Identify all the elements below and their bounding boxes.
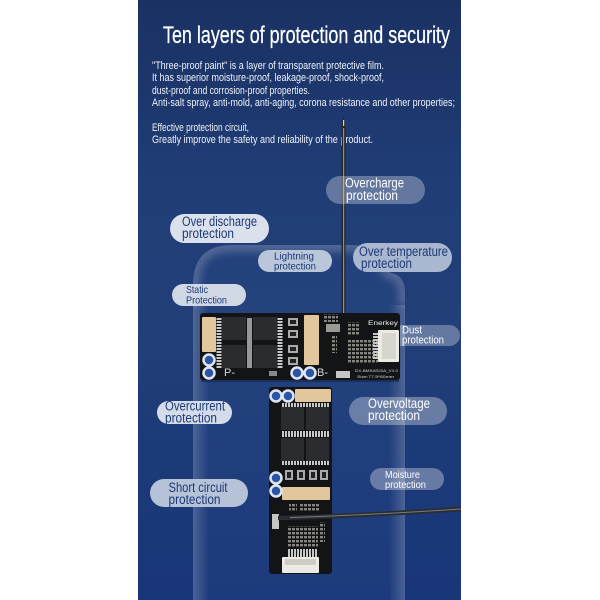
description text block — [152, 60, 455, 146]
label: overcharge protection: Overcharge — [345, 176, 404, 190]
label: short circuit protection: Short circuit — [168, 480, 228, 495]
label: over temperature protection: protection — [361, 256, 412, 271]
small components, horizontal board — [324, 314, 378, 378]
label: overcurrent protection — [157, 398, 232, 426]
label: over discharge protection: protection — [182, 226, 234, 241]
label: over temperature protection: Over temperature — [359, 244, 448, 259]
white connector, vertical board — [282, 557, 319, 573]
label: short circuit protection: protection — [168, 492, 220, 507]
mounting holes, horizontal board — [204, 354, 316, 378]
description text block: Effective protection circuit, — [152, 122, 249, 134]
description text block: Anti-salt spray, anti-mold, anti-aging, corona resistance and other properties; — [152, 97, 455, 109]
label: over discharge protection — [170, 214, 269, 243]
vertical antenna wire — [342, 116, 346, 372]
label: overcurrent protection: Overcurrent — [165, 398, 225, 414]
white connector, horizontal board — [373, 330, 399, 362]
board labels — [224, 320, 399, 379]
label: overcharge protection: protection — [346, 188, 398, 203]
horizontal PCB board — [200, 313, 400, 380]
description text block: Greatly improve the safety and reliability of the product. — [152, 134, 373, 146]
transparent cylinder outline — [193, 245, 405, 600]
description text block: It has superior moisture-proof, leakage-proof, shock-proof, — [152, 72, 384, 84]
title: Ten layers of protection and security — [163, 22, 450, 49]
small components, vertical board — [272, 503, 325, 557]
vertical PCB board — [269, 387, 332, 574]
label: moisture protection: Moisture — [385, 469, 420, 481]
label: overcharge protection — [326, 176, 425, 204]
label: overcurrent protection: protection — [165, 410, 217, 426]
board labels: B- — [317, 367, 328, 379]
label: dust protection — [400, 324, 460, 346]
board labels: P- — [224, 367, 235, 379]
label: dust protection: Dust — [402, 324, 422, 336]
label: overvoltage protection — [349, 396, 447, 425]
label: overvoltage protection: Overvoltage — [368, 396, 430, 411]
label: moisture protection — [370, 468, 444, 491]
label: static protection — [172, 284, 246, 306]
MOSFETs, vertical board — [281, 403, 329, 480]
horizontal antenna wire — [278, 509, 461, 518]
board labels: Enerkey — [368, 320, 399, 327]
label: lightning protection — [258, 250, 332, 272]
label: overvoltage protection: protection — [368, 408, 420, 423]
label: lightning protection: protection — [274, 260, 316, 272]
label: static protection: Static — [186, 284, 208, 296]
label: moisture protection: protection — [385, 479, 426, 491]
label: over temperature protection — [353, 243, 452, 272]
gold pads, vertical board — [282, 389, 331, 500]
description text block: "Three-proof paint" is a layer of transparent protective film. — [152, 60, 384, 72]
gold pads, horizontal board — [202, 315, 319, 365]
label: short circuit protection — [150, 479, 248, 507]
board labels: Size:77.5*60mm — [357, 375, 394, 379]
mounting holes, vertical board — [270, 390, 294, 496]
label: over discharge protection: Over discharge — [182, 214, 257, 229]
description text block: dust-proof and corrosion-proof properties. — [152, 85, 310, 97]
label: static protection: Protection — [186, 294, 227, 306]
label: lightning protection: Lightning — [274, 250, 314, 262]
label: dust protection: protection — [402, 334, 444, 346]
board labels: DX-BMS4S20A_V1.0 — [355, 369, 398, 373]
MOSFETs, horizontal board — [216, 317, 298, 376]
blue background panel — [138, 0, 461, 600]
